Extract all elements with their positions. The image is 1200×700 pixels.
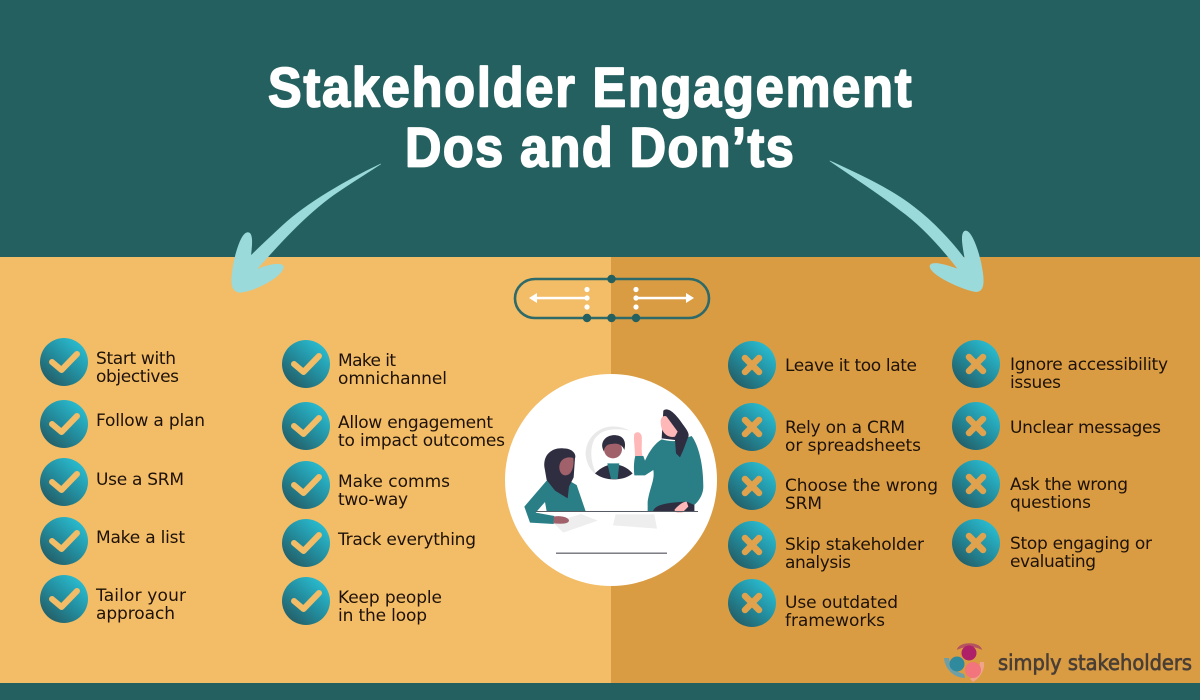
do item: Start with objectives (40, 338, 179, 387)
don't item: Ask the wrong questions: Ask the wrong (1010, 475, 1128, 495)
don't item: Rely on a CRM or spreadsheets (728, 403, 921, 456)
do item: Allow engagement to impact outcomes (282, 402, 505, 451)
person: right woman (634, 409, 703, 513)
video call bubble (586, 426, 633, 479)
panel: don'ts background (611, 257, 1200, 683)
don't item: Unclear messages: Unclear messages (1010, 418, 1161, 438)
title: Dos and Don’ts (405, 117, 794, 179)
do item: Keep people in the loop (282, 577, 442, 626)
don't item: Use outdated frameworks (728, 579, 898, 631)
do item: Make it omnichannel: omnichannel (338, 369, 447, 389)
do item: Make comms two-way: Make comms (338, 472, 450, 492)
do item: Track everything: Track everything (337, 530, 476, 550)
don't item: Unclear messages (952, 402, 1161, 450)
papers on table (553, 514, 657, 533)
don't item: Ask the wrong questions: questions (1010, 493, 1091, 513)
icon: split arrows pill (515, 275, 709, 322)
header band (0, 0, 1200, 257)
do item: Allow engagement to impact outcomes: to impact outcomes (338, 431, 505, 451)
don't item: Ask the wrong questions (952, 460, 1128, 513)
don't item: Use outdated frameworks: Use outdated (785, 593, 898, 613)
arrow: to don'ts (830, 161, 983, 292)
do item: Make it omnichannel (282, 340, 447, 389)
don't item: Stop engaging or evaluating: evaluating (1010, 552, 1096, 572)
table lines (536, 511, 698, 554)
do item: Make a list (40, 517, 185, 565)
don't item: Rely on a CRM or spreadsheets: or spreadsheets (785, 436, 921, 456)
do item: Allow engagement to impact outcomes: Allow engagement (338, 413, 493, 433)
do item: Track everything (282, 519, 476, 567)
do item: Follow a plan (40, 400, 205, 448)
illustration: video meeting (505, 374, 717, 586)
don't item: Ignore accessibility issues (952, 340, 1168, 393)
don't item: Choose the wrong SRM (728, 462, 938, 514)
don't item: Leave it too late: Leave it too late (785, 356, 917, 376)
do item: Start with objectives: objectives (96, 367, 179, 387)
do item: Keep people in the loop: Keep people (338, 588, 442, 608)
don't item: Stop engaging or evaluating: Stop engaging or (1010, 534, 1152, 554)
do item: Make it omnichannel: Make it (338, 351, 396, 371)
do item: Follow a plan: Follow a plan (96, 411, 205, 431)
arrow: to dos (232, 164, 381, 292)
person: left woman (524, 448, 586, 524)
don't item: Skip stakeholder analysis: analysis (785, 553, 851, 573)
title (268, 57, 912, 179)
do item: Use a SRM: Use a SRM (96, 470, 184, 490)
panel: dos background (0, 257, 611, 683)
logo mark (944, 643, 984, 682)
do item: Tailor your approach: Tailor your (95, 586, 186, 606)
don't item: Rely on a CRM or spreadsheets: Rely on a CRM (785, 418, 905, 438)
don't item: Skip stakeholder analysis: Skip stakeholder (785, 535, 924, 555)
don't item: Choose the wrong SRM: Choose the wrong (785, 476, 938, 496)
do item: Keep people in the loop: in the loop (338, 606, 427, 626)
don't item: Ignore accessibility issues: issues (1010, 373, 1061, 393)
do item: Make comms two-way (282, 461, 450, 510)
do item: Make comms two-way: two-way (338, 490, 408, 510)
logo: simply stakeholders (944, 643, 1192, 682)
title: Stakeholder Engagement (268, 57, 912, 119)
don't item: Ignore accessibility issues: Ignore accessibility (1010, 355, 1168, 375)
do item: Tailor your approach: approach (96, 604, 175, 624)
do item: Tailor your approach (40, 575, 186, 624)
don't item: Leave it too late (728, 341, 917, 389)
don't item: Choose the wrong SRM: SRM (785, 494, 822, 514)
don't item: Use outdated frameworks: frameworks (785, 611, 885, 631)
don't item: Stop engaging or evaluating (952, 519, 1152, 572)
footer band (0, 683, 1200, 700)
do item: Make a list: Make a list (96, 528, 185, 548)
do item: Use a SRM (40, 458, 184, 506)
don't item: Skip stakeholder analysis (728, 521, 924, 573)
do item: Start with objectives: Start with (96, 349, 176, 369)
